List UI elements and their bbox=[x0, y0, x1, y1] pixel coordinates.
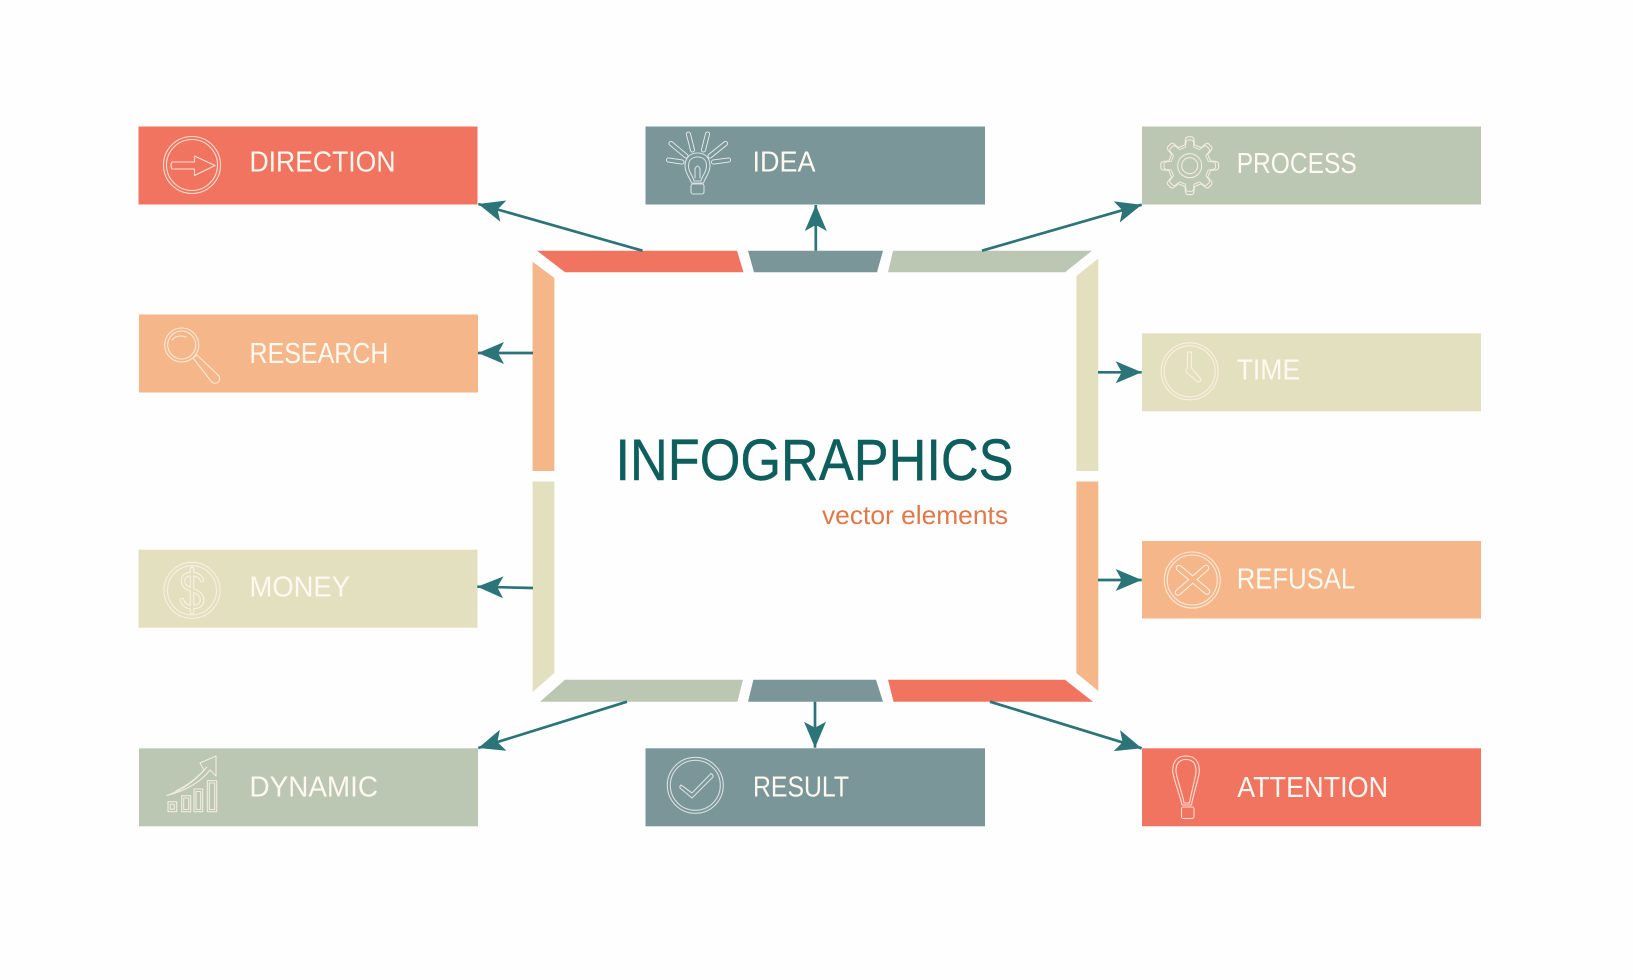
panel: process bbox=[1142, 126, 1481, 204]
panel: research bbox=[139, 314, 478, 392]
frame segment: bottom left bbox=[540, 680, 743, 702]
panel: money: MONEY bbox=[250, 572, 350, 604]
arrow: to idea bbox=[814, 205, 817, 251]
frame segment: right upper bbox=[1076, 258, 1098, 471]
icon: exclamation mark bbox=[1173, 756, 1199, 818]
panel: result bbox=[646, 748, 985, 826]
arrow: to money bbox=[477, 587, 533, 588]
arrow: to time bbox=[1098, 371, 1142, 374]
panel: dynamic bbox=[139, 748, 478, 826]
frame segment: left upper bbox=[533, 262, 554, 471]
panel: refusal bbox=[1142, 541, 1481, 618]
icon: cross bbox=[1164, 552, 1220, 608]
panel: time: TIME bbox=[1237, 355, 1300, 387]
arrow: to result bbox=[814, 702, 816, 748]
frame segment: bottom right bbox=[888, 680, 1093, 702]
frame segment: top right bbox=[888, 251, 1092, 272]
panel: dynamic: DYNAMIC bbox=[250, 771, 378, 803]
panel: time bbox=[1142, 333, 1481, 411]
center frame bbox=[533, 251, 1098, 702]
icon: growth chart bbox=[167, 756, 217, 812]
panel: process: PROCESS bbox=[1237, 148, 1357, 180]
icon: check mark bbox=[667, 757, 723, 813]
panel: refusal: REFUSAL bbox=[1237, 563, 1355, 595]
icon: dollar coin bbox=[164, 562, 220, 618]
subtitle: vector elements bbox=[822, 500, 1008, 530]
title: INFOGRAPHICS bbox=[616, 428, 1014, 493]
panel: attention bbox=[1142, 748, 1481, 826]
panel: direction bbox=[138, 126, 478, 204]
panel: research: RESEARCH bbox=[250, 338, 388, 370]
arrow: to attention bbox=[990, 702, 1142, 748]
icon: light bulb bbox=[668, 134, 729, 194]
arrow: to research bbox=[478, 352, 533, 354]
arrow: to process bbox=[982, 205, 1142, 251]
arrow: to dynamic bbox=[478, 702, 627, 748]
icon: arrow in circle bbox=[164, 136, 220, 194]
frame segment: left lower bbox=[533, 482, 554, 692]
frame segment: right lower bbox=[1076, 482, 1098, 691]
panel: money bbox=[138, 550, 478, 628]
icon: gear bbox=[1161, 137, 1219, 195]
panel: direction: DIRECTION bbox=[250, 146, 396, 178]
arrow: to refusal bbox=[1098, 579, 1142, 581]
panel: result: RESULT bbox=[753, 771, 849, 803]
icon: clock bbox=[1161, 343, 1218, 400]
panel: idea: IDEA bbox=[752, 146, 816, 178]
frame segment: bottom center bbox=[748, 680, 883, 702]
icon: magnifier bbox=[165, 328, 220, 383]
frame segment: top left bbox=[537, 251, 744, 272]
arrow: to direction bbox=[478, 204, 642, 251]
frame segment: top center bbox=[748, 251, 883, 272]
panel: idea bbox=[646, 126, 985, 204]
panel: attention: ATTENTION bbox=[1237, 772, 1388, 804]
